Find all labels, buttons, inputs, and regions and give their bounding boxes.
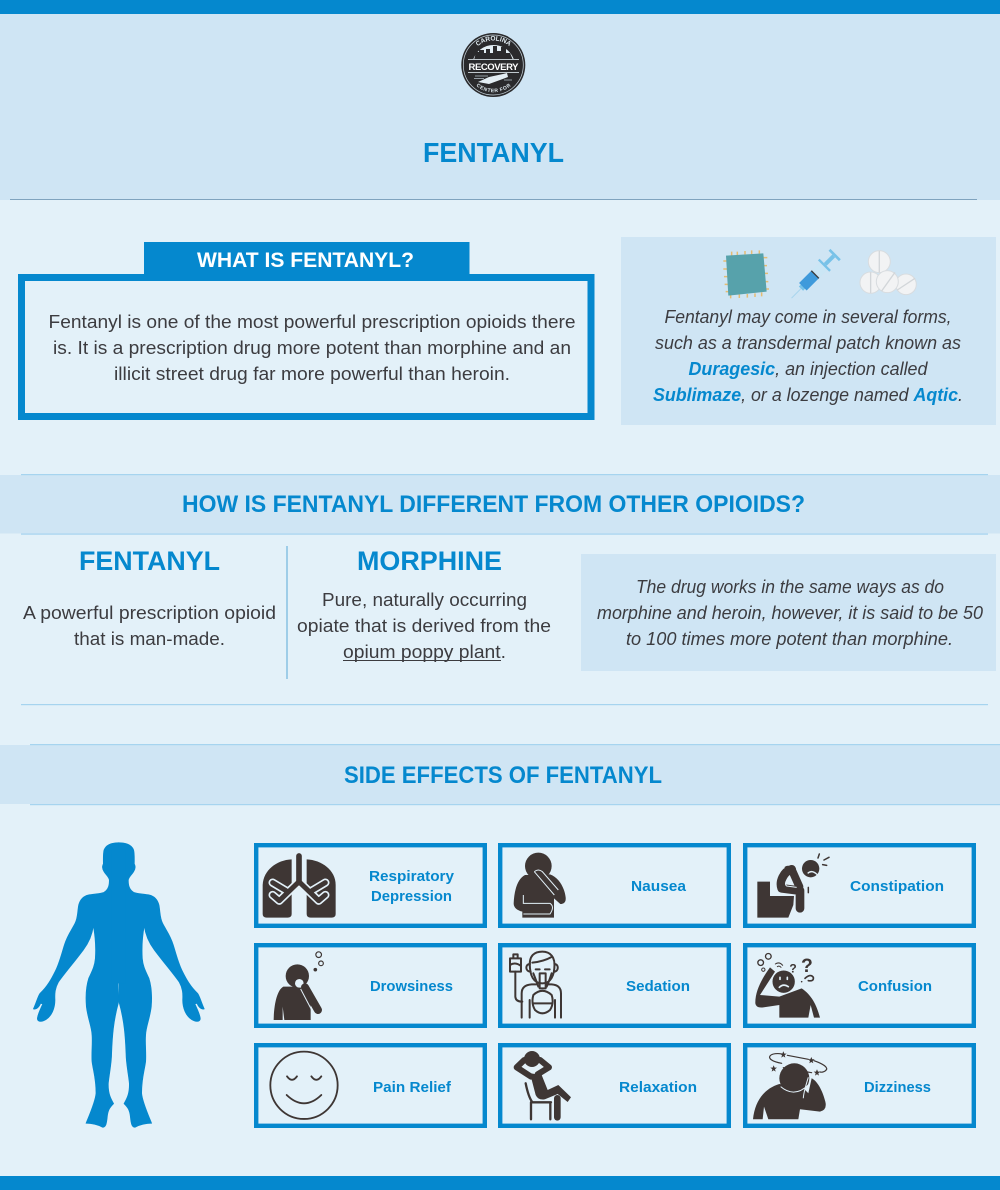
card: constipation: Constipation	[850, 879, 944, 895]
icon: dizzy person	[753, 1051, 827, 1119]
logo: RECOVERY	[468, 62, 519, 73]
icon: drowsy person	[274, 952, 323, 1020]
card: pain relief: Pain Relief	[373, 1080, 451, 1096]
card: respiratory depression: Depression	[371, 889, 452, 905]
icon: nausea person	[514, 853, 566, 918]
icon: pills	[860, 251, 916, 295]
card: dizziness	[745, 1045, 974, 1126]
icon: smiley	[270, 1052, 338, 1119]
section band: how is fentanyl different	[0, 474, 1000, 535]
card: nausea: Nausea	[631, 879, 687, 895]
callout: potency: The drug works in the same ways as do	[636, 577, 944, 597]
logo	[461, 33, 526, 97]
callout: potency: morphine and heroin, however, it is said to be 50	[597, 603, 983, 623]
column: fentanyl: that is man-made.	[74, 629, 225, 649]
icon: syringe	[786, 248, 841, 304]
title: FENTANYL	[423, 137, 564, 168]
icon: relaxing person	[517, 1051, 571, 1119]
forms text: Sublimaze, or a lozenge named Aqtic.	[653, 385, 963, 405]
column: morphine: opium poppy plant.	[343, 642, 506, 662]
callout: potency	[581, 554, 996, 671]
top bar	[0, 0, 1000, 14]
header band	[0, 14, 1000, 200]
panel: what is fentanyl	[22, 242, 591, 416]
column: fentanyl	[23, 546, 276, 649]
logo: CAROLINA	[476, 36, 510, 46]
section band: side effects: SIDE EFFECTS OF FENTANYL	[344, 762, 662, 789]
icon: lungs	[263, 856, 336, 918]
bottom bar	[0, 1176, 1000, 1190]
panel: forms of fentanyl	[621, 237, 996, 425]
forms text	[653, 307, 963, 405]
card: relaxation	[500, 1045, 729, 1126]
card: relaxation: Relaxation	[619, 1080, 697, 1096]
heading text: WHAT IS FENTANYL?	[197, 249, 414, 272]
card: confusion: Confusion	[858, 979, 932, 995]
column: morphine: opiate that is derived from the	[297, 616, 551, 636]
column: morphine	[297, 546, 551, 662]
forms text: Fentanyl may come in several forms,	[664, 307, 952, 327]
card: respiratory depression	[256, 845, 485, 926]
box frame	[22, 278, 591, 416]
callout: potency: to 100 times more potent than morphine.	[626, 629, 953, 649]
icon: human body	[33, 843, 204, 1127]
definition text: is. It is a prescription drug more potent than morphine and an	[53, 338, 571, 358]
icon: patch	[723, 250, 769, 298]
definition text: Fentanyl is one of the most powerful prescription opioids there	[48, 312, 576, 332]
card: sedation	[500, 945, 729, 1026]
section band: how is fentanyl different: HOW IS FENTANYL DIFFERENT FROM OTHER OPIOIDS?	[182, 491, 805, 518]
column: fentanyl: A powerful prescription opioid	[23, 603, 276, 623]
card: confusion	[745, 945, 974, 1026]
icon: confused person	[755, 953, 820, 1018]
column: morphine: MORPHINE	[357, 546, 502, 576]
icon: patient with mask	[510, 952, 561, 1018]
icon: confused person: ?	[801, 956, 813, 977]
column: fentanyl: FENTANYL	[79, 546, 220, 576]
card: nausea	[500, 845, 729, 926]
definition text: illicit street drug far more powerful than heroin.	[114, 364, 510, 384]
definition text	[48, 312, 576, 384]
forms text: such as a transdermal patch known as	[655, 333, 961, 353]
card: sedation: Sedation	[626, 979, 690, 995]
icon: confused person: ?	[789, 962, 797, 976]
card: pain relief	[256, 1045, 485, 1126]
icon: toilet person	[757, 854, 829, 918]
logo: CENTER FOR	[476, 84, 511, 92]
card: respiratory depression: Respiratory	[369, 869, 454, 885]
card: constipation	[745, 845, 974, 926]
section band: side effects	[0, 744, 1000, 805]
card: dizziness: Dizziness	[864, 1080, 931, 1096]
card: drowsiness: Drowsiness	[370, 979, 453, 995]
card: drowsiness	[256, 945, 485, 1026]
column: morphine: Pure, naturally occurring	[322, 590, 527, 610]
forms text: Duragesic, an injection called	[688, 359, 928, 379]
heading tab	[144, 242, 470, 275]
